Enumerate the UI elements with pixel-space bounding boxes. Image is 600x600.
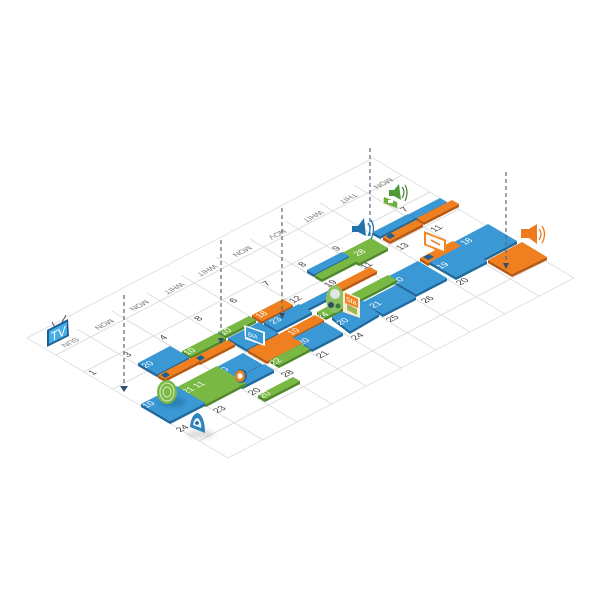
block: orange 13 [335, 267, 377, 292]
date numbers: 6 [227, 297, 241, 305]
block: green big lower [177, 366, 246, 407]
icon: green round badge [326, 285, 344, 313]
weekday header labels: MON [230, 245, 254, 258]
weekday header labels: MON [92, 318, 116, 331]
block: green 20 bottom: 20 [256, 390, 273, 399]
icon: TV [47, 315, 69, 347]
block: blue strip 8 [307, 252, 349, 277]
weekday header labels: WHIT [300, 209, 326, 223]
date numbers: 20 [245, 386, 264, 397]
date numbers: 24 [173, 423, 192, 434]
date numbers: 7 [260, 280, 274, 288]
block: blue upper middle [264, 304, 312, 333]
block: blue 20 [387, 261, 447, 297]
icon: green speaker [389, 184, 407, 201]
weekday header labels: THIT [336, 192, 360, 205]
arrow heads [120, 263, 509, 392]
block: blue small 12 [300, 289, 338, 312]
block: orange big centre [248, 332, 302, 364]
weekday header labels: MON [127, 299, 151, 312]
block: blue 20 with number [293, 322, 343, 352]
block: green big lower: 21 11 [179, 380, 207, 395]
block: blue 20 with number: 20 [295, 337, 312, 346]
block: blue 20 lower [213, 353, 262, 383]
date numbers: 8 [192, 315, 206, 323]
block: orange strip top [417, 200, 459, 225]
block: orange with chat card [420, 241, 461, 266]
block: blue 20 centre: 20 [334, 317, 351, 326]
block: blue 20 lower: 20 [214, 366, 231, 375]
date numbers: 20 [453, 276, 472, 287]
weekday header labels [59, 177, 395, 349]
block: blue upper middle: 23 [267, 316, 284, 325]
date numbers: 13 [393, 241, 412, 252]
block: green 10 left: 10 [181, 347, 198, 356]
icon: orange chat card [424, 231, 446, 255]
weekday header labels: WHIT [194, 263, 220, 277]
block: blue 18 top right: 18 [458, 237, 475, 246]
icon: orange white card [343, 291, 360, 318]
date numbers: 19 [321, 278, 340, 289]
icon: orange speaker [521, 224, 544, 244]
date numbers: 23 [210, 404, 229, 415]
weekday header labels: SUN [59, 336, 82, 349]
block: orange 10 [283, 315, 324, 340]
block: orange left 2 [193, 340, 235, 365]
block: blue 20 left [138, 346, 189, 377]
block: orange 10: 10 [285, 327, 302, 336]
block: blue mid [228, 322, 278, 352]
block: green 10 upper: 10 [217, 327, 234, 336]
icon: green tag [383, 197, 398, 209]
block: blue 19: 19 [434, 261, 451, 270]
date numbers: 12 [286, 294, 305, 305]
block: blue 20 left: 20 [139, 360, 156, 369]
icon: monitor card: BIA [248, 331, 259, 341]
block: green 9: 28 [351, 248, 368, 257]
date numbers: 4 [157, 334, 171, 342]
date numbers: 28 [278, 368, 297, 379]
block: orange 18 [252, 299, 293, 324]
block: blue strip [373, 214, 415, 239]
icon: blue speaker [352, 218, 374, 239]
block: green 20 bottom [256, 377, 300, 402]
block: blue big lower left [140, 386, 205, 424]
block: blue 21 [363, 285, 416, 317]
date numbers: 8 [296, 261, 310, 269]
date numbers: 11 [428, 224, 446, 234]
date numbers: 25 [383, 313, 402, 324]
icon: blue location badge [186, 413, 214, 438]
date numbers: 21 [313, 349, 332, 360]
block: green 22: 22 [267, 357, 284, 366]
date numbers: 7 [398, 206, 412, 214]
date numbers: 1 [86, 369, 100, 377]
block: green 10 upper [217, 316, 256, 339]
block: orange strip [383, 220, 423, 244]
block: green long strip [314, 275, 397, 320]
weekday header labels: NOV [265, 228, 289, 241]
block: orange 18: 18 [253, 310, 270, 319]
block: blue 21: 21 [367, 300, 384, 309]
block: blue lower strip [233, 364, 274, 389]
block: blue 20: 20 [389, 276, 406, 285]
block: blue big lower left: 10 [140, 400, 157, 409]
weekday header labels: WHIT [161, 281, 187, 295]
date numbers: 3 [121, 351, 135, 359]
block: blue 20 centre [332, 300, 379, 334]
weekday header labels: MON [371, 177, 395, 190]
block: orange large right [488, 242, 547, 277]
block: green long strip: 24 [314, 311, 331, 320]
date numbers: 11 [358, 261, 376, 271]
dashed arrow lines [124, 148, 506, 387]
date numbers: 26 [418, 294, 437, 305]
calendar grid [27, 158, 574, 458]
icon: green target [157, 380, 185, 407]
icon: orange white card: Sta [346, 294, 357, 307]
block: blue 19 [430, 246, 487, 280]
icon: monitor card [244, 325, 265, 346]
date numbers: 24 [348, 331, 367, 342]
block: green 10 left [181, 333, 226, 359]
block: green strip 8 [315, 257, 357, 282]
block: orange left [158, 357, 200, 382]
block: blue strip top [409, 198, 447, 221]
block: green 9 [342, 238, 388, 266]
block: blue 18 top right [454, 224, 517, 262]
block: green 22 [267, 344, 310, 368]
icon: TV: TV [51, 322, 66, 345]
date numbers [86, 206, 472, 434]
icon: gauge badge [235, 369, 247, 383]
date numbers: 9 [330, 245, 344, 253]
